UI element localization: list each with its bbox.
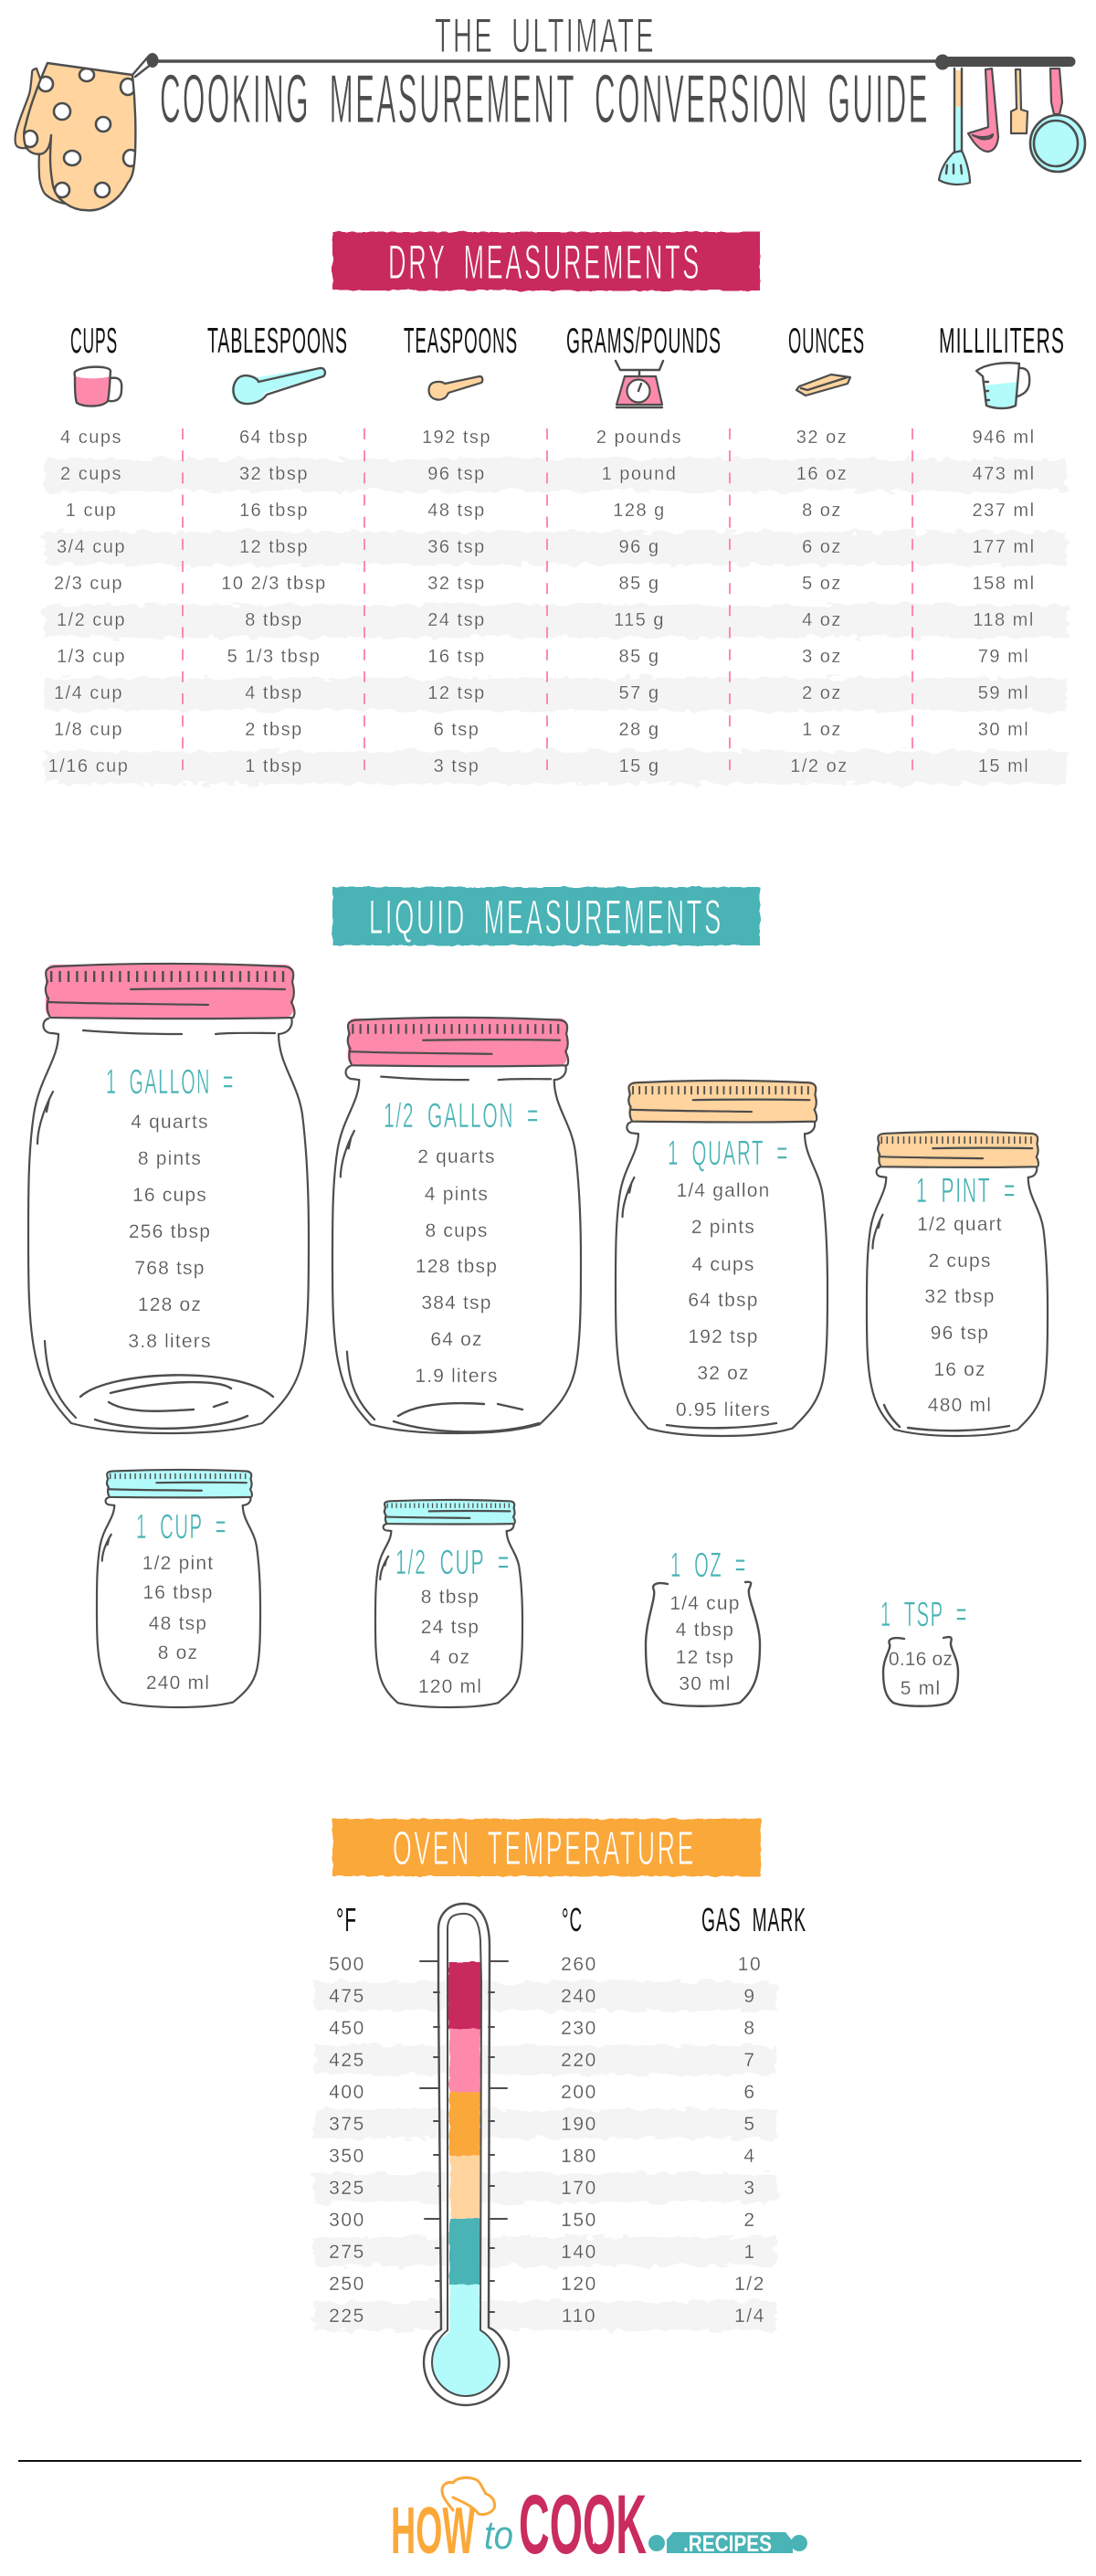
column: teaspoons: 48 tsp [427,501,486,521]
column: cups: 1/2 cup [57,610,126,630]
column: cups: 2 cups [60,464,122,484]
jar: 1 cup [97,1470,260,1707]
column: celsius: 240 [561,1986,597,2007]
column headings: °F [336,1901,357,1938]
column: tablespoons: 8 tbsp [245,610,303,630]
conversions: 4 quarts [131,1112,209,1133]
column: cups: 1/4 cup [54,683,123,703]
conversions [418,1587,482,1697]
footer rule [18,2460,1081,2462]
column headings: TEASPOONS [404,322,518,361]
column: fahrenheit: 425 [329,2050,365,2071]
column: gas mark: 10 [738,1954,762,1975]
column: celsius [561,1954,597,2327]
conversions: 768 tsp [134,1258,206,1279]
conversions: 32 oz [697,1363,750,1384]
jar: 1 pint [867,1132,1048,1436]
column: ounces: 1/2 oz [790,756,848,776]
conversions: 16 tbsp [142,1582,214,1603]
column: gas mark: 7 [743,2050,756,2071]
column: teaspoons: 6 tsp [434,720,480,740]
column: tablespoons: 32 tbsp [239,464,309,484]
column: tablespoons: 1 tbsp [245,756,303,776]
column: celsius: 180 [561,2146,597,2167]
column: fahrenheit [329,1954,365,2327]
conversions: 1/4 gallon [676,1180,771,1201]
icon: measuring jug [976,363,1029,408]
heading: 1 CUP = [136,1508,227,1547]
column: gas mark: 8 [743,2018,756,2039]
conversions: 2 quarts [417,1146,496,1167]
column: teaspoons: 36 tsp [427,537,486,557]
column: ounces: 1 oz [802,720,842,740]
column: tablespoons: 2 tbsp [245,720,303,740]
column: grams and pounds: 128 g [613,501,666,521]
hanging rail [146,53,1070,69]
wordmark: cook: COOK [519,2478,647,2571]
rolling pin [648,2531,807,2557]
icon: kitchen scale [616,361,663,407]
icon: ladle [968,69,998,152]
conversions: 8 tbsp [421,1587,480,1608]
liquid fill [432,1962,500,2396]
conversions: 240 ml [146,1673,210,1694]
conversions: 24 tsp [421,1617,480,1638]
column: cups: 3/4 cup [57,537,126,557]
column: milliliters: 79 ml [978,647,1029,667]
column: ounces: 3 oz [802,647,842,667]
conversions: 30 ml [679,1673,732,1694]
jar: 1 tsp [880,1596,968,1706]
column: cups: 4 cups [60,428,122,448]
column dividers [183,428,912,770]
conversions: 16 oz [933,1359,986,1380]
rolling pin: .RECIPES [683,2531,772,2557]
heading: 1 QUART = [668,1135,789,1173]
conversions: 480 ml [928,1395,992,1416]
column: fahrenheit: 400 [329,2082,365,2103]
heading: 1 GALLON = [106,1063,235,1102]
column: ounces: 2 oz [802,683,842,703]
conversions: 4 cups [691,1254,755,1275]
scale ticks [420,1961,508,2312]
column: cups: 1/16 cup [48,756,129,776]
panel: dry measurements [45,232,1067,784]
conversions [676,1180,771,1420]
column: fahrenheit: 250 [329,2274,365,2295]
column: teaspoons [422,428,491,776]
column: tablespoons: 12 tbsp [239,537,309,557]
column: teaspoons: 12 tsp [427,683,486,703]
jar: 1 gallon [28,964,309,1433]
column: fahrenheit: 500 [329,1954,365,1975]
conversions: 1/4 cup [669,1593,741,1614]
column: grams and pounds: 96 g [619,537,659,557]
column: fahrenheit: 325 [329,2178,365,2199]
banner: dry measurements: DRY MEASUREMENTS [388,236,701,290]
column: celsius: 200 [561,2082,597,2103]
column headings [336,1901,806,1938]
column: ounces [790,428,848,776]
column: tablespoons: 16 tbsp [239,501,309,521]
conversions: 2 cups [928,1251,992,1272]
column: fahrenheit: 475 [329,1986,365,2007]
column: grams and pounds: 15 g [619,756,659,776]
conversions: 384 tsp [421,1293,492,1314]
column: tablespoons: 5 1/3 tbsp [227,647,321,667]
heading: 1 OZ = [670,1547,747,1585]
conversions: 1/2 quart [917,1214,1003,1235]
column: fahrenheit: 375 [329,2114,365,2135]
column: celsius: 120 [561,2274,597,2295]
conversions: 16 cups [132,1185,207,1206]
column: cups: 2/3 cup [54,574,123,594]
column: gas mark [734,1954,765,2327]
conversions: 0.95 liters [676,1399,771,1420]
column headings: GAS MARK [701,1901,806,1938]
conversions [889,1649,953,1699]
icon: spatula [939,69,970,185]
column: tablespoons [221,428,327,776]
column: fahrenheit: 450 [329,2018,365,2039]
column: gas mark: 1 [743,2242,756,2263]
column: cups: 1 cup [66,501,117,521]
column: gas mark: 2 [743,2210,756,2231]
conversions: 12 tsp [676,1647,734,1668]
column: grams and pounds [596,428,682,776]
column headings: CUPS [70,322,118,361]
jar: 1 quart [616,1081,827,1436]
column: teaspoons: 24 tsp [427,610,486,630]
column: celsius: 220 [561,2050,597,2071]
jar: 1/2 gallon [332,1018,581,1433]
column: milliliters: 177 ml [972,537,1036,557]
icon: oven mitt [16,55,152,210]
banner: dry measurements [332,232,760,290]
column: teaspoons: 16 tsp [427,647,486,667]
banner: oven temperature [332,1819,761,1876]
column: cups: 1/8 cup [54,720,123,740]
column: cups: 1/3 cup [57,647,126,667]
conversions [142,1553,214,1694]
column: celsius: 230 [561,2018,597,2039]
column: gas mark: 5 [743,2114,756,2135]
conversions: 4 oz [430,1647,470,1668]
column: gas mark: 3 [743,2178,756,2199]
column: celsius: 110 [562,2306,596,2327]
conversions: 8 oz [158,1642,198,1663]
column: fahrenheit: 225 [329,2306,365,2327]
heading: 1/2 GALLON = [384,1097,540,1135]
column: ounces: 32 oz [796,428,848,448]
column: ounces: 8 oz [802,501,842,521]
column: fahrenheit: 300 [329,2210,365,2231]
banner: liquid measurements: LIQUID MEASUREMENTS [369,891,723,945]
column: milliliters: 118 ml [973,610,1035,630]
conversions: 64 oz [430,1329,483,1350]
conversions: 96 tsp [931,1323,989,1344]
conversions: 128 tbsp [416,1256,498,1277]
conversions: 8 cups [425,1220,489,1241]
column: ounces: 16 oz [796,464,848,484]
icon: pan [1030,69,1085,172]
column: teaspoons: 32 tsp [427,574,486,594]
icon: cup [75,367,121,406]
column: celsius: 260 [561,1954,597,1975]
conversions: 120 ml [418,1676,482,1697]
conversions: 4 tbsp [676,1620,734,1641]
conversions: 0.16 oz [889,1649,953,1670]
column: celsius: 190 [561,2114,597,2135]
heading: 1/2 CUP = [395,1544,511,1582]
conversions: 3.8 liters [128,1331,212,1352]
column: milliliters: 30 ml [978,720,1029,740]
conversions [669,1593,741,1694]
icon: chef hat [442,2477,495,2515]
header [16,9,1085,210]
column: tablespoons: 10 2/3 tbsp [221,574,327,594]
column: gas mark: 1/2 [734,2274,765,2295]
conversions: 2 pints [691,1217,755,1238]
banner: oven temperature: OVEN TEMPERATURE [393,1822,696,1875]
column headings [70,322,1065,361]
column: celsius: 150 [561,2210,597,2231]
column: grams and pounds: 115 g [614,610,665,630]
table row bands [314,1981,776,2330]
column: gas mark: 9 [743,1986,756,2007]
icon: butter [796,375,850,396]
thermometer [420,1904,509,2405]
column: milliliters: 473 ml [972,464,1036,484]
conversions: 5 ml [901,1678,941,1699]
column: cups [48,428,129,776]
banner: liquid measurements [332,887,760,945]
title: the ultimate: THE ULTIMATE [435,9,656,63]
conversions: 64 tbsp [688,1290,759,1311]
logo: how to cook recipes [391,2477,807,2571]
conversions: 1.9 liters [415,1366,499,1387]
column headings: °C [562,1901,583,1938]
jar: 1/2 cup [375,1500,522,1707]
column: fahrenheit: 350 [329,2146,365,2167]
column headings: GRAMS/POUNDS [566,322,722,361]
column: gas mark: 6 [743,2082,756,2103]
column: ounces: 5 oz [802,574,842,594]
glass outline [432,1914,500,2396]
column: grams and pounds: 57 g [619,683,659,703]
icon: tablespoon [232,367,325,404]
column: grams and pounds: 85 g [619,647,659,667]
column headings: TABLESPOONS [207,322,348,361]
wordmark: to: to [484,2513,513,2558]
column: ounces: 4 oz [802,610,842,630]
column: fahrenheit: 275 [329,2242,365,2263]
conversions: 256 tbsp [129,1221,211,1242]
icon: small spatula [1011,69,1028,133]
column: gas mark: 1/4 [734,2306,765,2327]
table row bands [45,459,1067,784]
column: grams and pounds: 1 pound [602,464,677,484]
conversions: 4 pints [425,1184,489,1205]
icon: spatula and whisk in the letters O [559,2512,601,2544]
column: celsius: 140 [561,2242,597,2263]
column: grams and pounds: 2 pounds [596,428,682,448]
column: grams and pounds: 28 g [619,720,659,740]
column: tablespoons: 64 tbsp [239,428,309,448]
column: tablespoons: 4 tbsp [245,683,303,703]
column: grams and pounds: 85 g [619,574,659,594]
heading: 1 PINT = [916,1172,1017,1210]
panel: oven temperature [314,1819,806,2405]
conversions [917,1214,1003,1416]
conversions: 48 tsp [149,1613,207,1634]
column headings: OUNCES [788,322,865,361]
wordmark: how: HOW [391,2495,475,2568]
column: milliliters: 946 ml [972,428,1036,448]
column: ounces: 6 oz [802,537,842,557]
conversions [128,1112,212,1352]
column: teaspoons: 192 tsp [422,428,491,448]
conversions: 8 pints [138,1148,202,1169]
icon: teaspoon [429,376,482,400]
conversions [415,1146,499,1387]
column: milliliters [972,428,1036,776]
jar: 1 oz [646,1547,760,1706]
column: milliliters: 59 ml [978,683,1029,703]
column: gas mark: 4 [743,2146,756,2167]
column: milliliters: 15 ml [978,756,1029,776]
conversions: 128 oz [138,1294,202,1315]
heading: 1 TSP = [880,1596,968,1634]
column: teaspoons: 96 tsp [427,464,486,484]
column: milliliters: 237 ml [972,501,1036,521]
column: celsius: 170 [561,2178,597,2199]
column: teaspoons: 3 tsp [434,756,480,776]
conversions: 32 tbsp [924,1286,996,1307]
column: milliliters: 158 ml [972,574,1036,594]
conversions: 192 tsp [688,1326,759,1347]
conversions: 1/2 pint [142,1553,214,1574]
panel: liquid measurements [28,887,1048,1707]
